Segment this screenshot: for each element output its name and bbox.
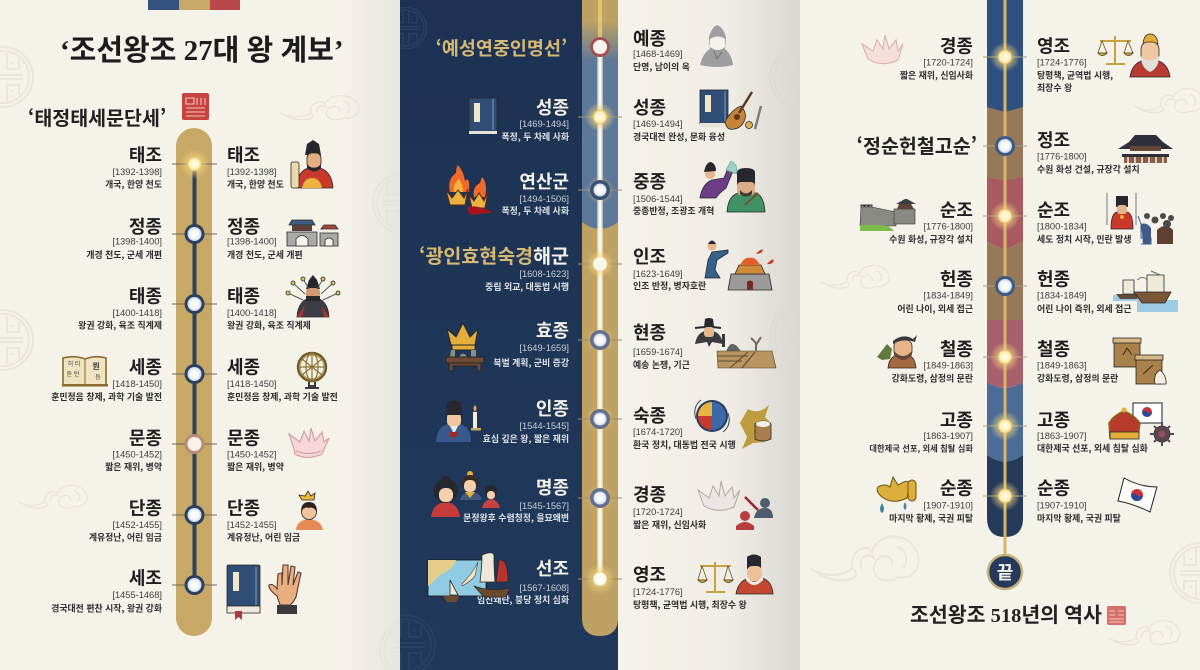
icon: 순종 Korean flag [1118, 478, 1157, 512]
entry: 광해군 [419, 240, 569, 293]
entry: 철종 right: 철종 [1037, 336, 1070, 362]
entry: 세종 left: [1418-1450] [112, 379, 162, 389]
entry: 연산군: 폭정, 두 차례 사화 [501, 204, 569, 217]
entry: 정조 [1037, 126, 1140, 176]
entry: 예종 [633, 25, 690, 73]
entry: 세종 right: [1418-1450] [227, 379, 277, 389]
entry: 광해군: [1608-1623] [519, 269, 569, 279]
entry: 인종: [1544-1545] [519, 421, 569, 431]
entry: 문종 left [105, 424, 162, 473]
entry: 헌종 left: 어린 나이, 외세 접근 [897, 302, 973, 315]
entry: 효종: 효종 [536, 317, 569, 343]
entry: 영조: 탕평책, 균역법 시행, 최장수 왕 [633, 598, 747, 611]
entry: 성종 right: 성종 [633, 94, 666, 120]
entry: 단종 right [227, 494, 300, 544]
entry: 순조 right: 순조 [1037, 196, 1070, 222]
entry: 문종 right: 문종 [227, 424, 260, 450]
title: ‘조선왕조 27대 왕 계보’ [60, 34, 344, 67]
node: 헌종 [995, 276, 1015, 296]
entry: 세종 left: 훈민정음 창제, 과학 기술 발전 [51, 390, 162, 403]
entry: 고종 right: [1863-1907] [1037, 431, 1087, 441]
entry: 태종 left: 왕권 강화, 육조 직계제 [78, 318, 162, 332]
entry: 효종 [493, 317, 569, 369]
entry: 영조 p3: 최장수 왕 [1037, 81, 1072, 94]
icon: 선조 map and ships [428, 553, 510, 602]
entry: 철종 right: 강화도령, 삼정의 문란 [1037, 372, 1118, 384]
entry: 인종 [483, 395, 569, 445]
timeline: panel 1 [172, 128, 217, 636]
node: 인종 [586, 405, 614, 433]
entry: 고종 right: 대한제국 선포, 외세 침탈 심화 [1037, 442, 1148, 454]
entry: 선조: 선조 [536, 555, 569, 581]
icon: 세종 armillary sphere [298, 353, 326, 388]
node: 세종 [184, 364, 204, 384]
icon: 세종 left open book: 듬 [95, 374, 101, 381]
entry: 고종 right: 고종 [1037, 406, 1070, 432]
panel: centre page paper [618, 0, 800, 670]
node: 세조 [184, 575, 204, 595]
entry: 성종 right: 경국대전 완성, 문화 융성 [633, 130, 725, 143]
entry: 고종 left: 고종 [940, 406, 973, 432]
entry: 명종 [463, 474, 569, 524]
entry: 경종 p3: 경종 [940, 32, 973, 58]
icon: 성종 book and guitar [700, 90, 761, 129]
entry: 영조: [1724-1776] [633, 587, 683, 597]
icon: 순조 crowd [1138, 213, 1174, 244]
mnemonic heading: 예성연중인명선: ‘예성연중인명선’ [436, 35, 567, 61]
entry: 순종 right [1037, 474, 1121, 524]
node: 인조 [586, 250, 614, 278]
node: 예종 [590, 37, 610, 57]
entry: 예종: [1468-1469] [633, 49, 683, 59]
entry: 숙종: 숙종 [633, 402, 666, 428]
entry: 태조 right: 태조 [227, 142, 260, 168]
entry: 광해군: 중립 외교, 대동법 시행 [485, 280, 569, 293]
entry: 단종 right: 단종 [227, 494, 260, 520]
entry: 순조 left: [1776-1800] [923, 222, 973, 232]
entry: 순조 right: 세도 정치 시작, 민란 발생 [1037, 232, 1131, 246]
entry: 순종 right: 순종 [1037, 474, 1070, 500]
icon: 정종 gates [287, 220, 338, 246]
entry: 문종 right [227, 424, 284, 473]
mnemonic heading: 정순헌철고순: ‘정순헌철고순’ [857, 130, 977, 159]
entry: 인종: 효심 깊은 왕, 짧은 재위 [483, 432, 569, 445]
entry: 헌종 right: [1834-1849] [1037, 290, 1087, 300]
entry: 문종 left: 짧은 재위, 병약 [105, 460, 162, 473]
entry: 문종 right: [1450-1452] [227, 450, 277, 460]
entry: 순조 left: 수원 화성, 규장각 설치 [889, 232, 973, 246]
entry: 순조 left: 순조 [940, 196, 973, 222]
entry: 효종: [1649-1659] [519, 343, 569, 353]
icon: footer seal [1107, 606, 1126, 625]
entry: 경종 p3: 짧은 재위, 신임사화 [900, 68, 973, 82]
node: 성종 [585, 102, 615, 132]
entry: 철종 left: [1849-1863] [923, 360, 973, 370]
entry: 철종 right: [1849-1863] [1037, 360, 1087, 370]
entry: 경종: [1720-1724] [633, 507, 683, 517]
entry: 순종 left: 마지막 황제, 국권 피탈 [889, 512, 973, 524]
node: 고종 [990, 411, 1020, 441]
entry: 태종 right: [1400-1418] [227, 308, 277, 318]
entry: 세조 left: 경국대전 편찬 시작, 왕권 강화 [51, 602, 162, 614]
node: 효종 [586, 326, 614, 354]
node: 선조 [585, 564, 615, 594]
entry: 영조 p3 [1037, 32, 1113, 94]
entry: 예종: 단명, 남이의 옥 [633, 60, 690, 73]
entry: 세조 left: 세조 [129, 564, 162, 590]
entry: 단종 left: 단종 [129, 494, 162, 520]
entry: 정종 left: 개경 천도, 군세 개편 [86, 248, 162, 261]
entry: 태조 left: 개국, 한양 천도 [105, 178, 162, 190]
entry: 인조: 인조 반정, 병자호란 [633, 279, 706, 292]
entry: 헌종 right: 헌종 [1037, 266, 1070, 292]
icon: 고종 flag, crown, virus [1109, 403, 1174, 446]
entry: 순종 left [889, 474, 973, 524]
entry: 세종 right: 훈민정음 창제, 과학 기술 발전 [227, 390, 338, 403]
entry: 문종 left: [1450-1452] [112, 450, 162, 460]
icon: 예종 hooded ghost [700, 25, 733, 67]
entry: 태종 left: [1400-1418] [112, 308, 162, 318]
entry: 인종: 인종 [536, 395, 569, 421]
icon: 철종 grain bags [1113, 338, 1166, 384]
icon: 영조 scales [698, 562, 733, 592]
node: 태조 [180, 149, 210, 179]
icon: 정조 palace [1118, 135, 1173, 163]
icon: 중종 reformers [700, 161, 765, 212]
entry: 헌종 right: 어린 나이 즉위, 외세 접근 [1037, 302, 1131, 315]
end badge: 끝 [997, 559, 1013, 585]
entry: 철종 left: 철종 [940, 336, 973, 362]
entry: 정종 left: 정종 [129, 213, 162, 239]
entry: 고종 left [869, 406, 973, 454]
entry: 순조 right [1037, 196, 1131, 246]
entry: 정종 right: [1398-1400] [227, 236, 277, 246]
node: 정종 [184, 224, 204, 244]
entry: 정조: 정조 [1037, 126, 1070, 152]
entry: 태조 left: [1392-1398] [112, 167, 162, 177]
entry: 명종: 명종 [536, 474, 569, 500]
entry: 고종 left: [1863-1907] [923, 431, 973, 441]
icon: 연산군 burning crowns [446, 165, 491, 215]
entry: 정조: 수원 화성 건설, 규장각 설치 [1037, 162, 1140, 176]
entry: 선조: 임진왜란, 붕당 정치 심화 [477, 593, 569, 606]
icon: 경종 crown and people [698, 481, 773, 530]
entry: 정조: [1776-1800] [1037, 152, 1087, 162]
entry: 세종 right [227, 354, 338, 403]
entry: 경종 p3 [900, 32, 973, 82]
icon: 세종 left open book [62, 357, 108, 386]
node: 경종/영조 [990, 42, 1020, 72]
entry: 헌종 left: 헌종 [940, 266, 973, 292]
entry: 태조 left: 태조 [129, 142, 162, 168]
entry: 문종 right: 짧은 재위, 병약 [227, 460, 284, 473]
entry: 헌종 right [1037, 266, 1131, 315]
entry: 중종: [1506-1544] [633, 194, 683, 204]
entry: 세조 left [51, 564, 162, 614]
entry: 현종: 예송 논쟁, 기근 [633, 358, 690, 371]
entry: 성종 navy [501, 94, 569, 143]
entry: 경종: 짧은 재위, 신임사화 [633, 518, 706, 531]
icon: 성종 left book [469, 98, 497, 134]
entry: 연산군: 연산군 [519, 168, 569, 194]
entry: 명종: [1545-1567] [519, 501, 569, 511]
entry: 태조 right: [1392-1398] [227, 167, 277, 177]
entry: 경종 [633, 481, 706, 531]
entry: 단종 left [89, 494, 162, 544]
icon: 영조 old king [736, 554, 773, 594]
icon: 세조 raised hand [269, 565, 301, 614]
entry: 단종 left: 계유정난, 어린 임금 [89, 530, 162, 544]
entry: 태조 right: 개국, 한양 천도 [227, 178, 284, 190]
entry: 철종 left [892, 336, 973, 384]
icon: 인조 pointing man and burning fortress [705, 240, 774, 290]
entry: 숙종 [633, 402, 736, 451]
entry: 중종: 중종반정, 조광조 개혁 [633, 204, 714, 217]
icon: 세종 left open book: 뭔 [92, 361, 100, 371]
icon: 순조 wall [860, 199, 916, 231]
entry: 중종: 중종 [633, 168, 666, 194]
entry: 현종: 현종 [633, 319, 666, 345]
entry: 철종 right [1037, 336, 1118, 384]
icon: 문종 pink crown [289, 428, 329, 458]
entry: 세종 right: 세종 [227, 354, 260, 380]
footer: 518 year caption: 조선왕조 518년의 역사 [910, 604, 1102, 627]
entry: 태조 left [105, 142, 162, 190]
timeline: panel 2 [578, 0, 622, 636]
entry: 정종 right [227, 213, 303, 261]
entry: 영조 p3: 탕평책, 균역법 시행, [1037, 68, 1113, 82]
icon: 숙종 wheel and map with rice [695, 400, 771, 449]
icon: 세조 navy book [227, 565, 260, 620]
node: 순조 [990, 201, 1020, 231]
icon: 영조 scales p3 [1098, 36, 1133, 64]
icon: 철종 farmer [877, 335, 917, 368]
icon: 세종 left open book: 듣 턴 [67, 370, 79, 378]
entry: 헌종 left: [1834-1849] [923, 290, 973, 300]
icon: 순조 king with bars [1107, 193, 1136, 229]
entry: 태종 left: 태종 [129, 282, 162, 308]
icon: 명종 queen and family [431, 471, 500, 517]
entry: 태종 right [227, 282, 311, 332]
icon: 헌종 ships [1113, 271, 1178, 312]
entry: 정종 left: [1398-1400] [112, 236, 162, 246]
top colour band [148, 0, 240, 10]
node: 명종 [586, 484, 614, 512]
entry: 순조 left [889, 196, 973, 246]
entry: 경종 p3: [1720-1724] [923, 58, 973, 68]
entry: 선조: [1567-1608] [519, 583, 569, 593]
entry: 경종: 경종 [633, 481, 666, 507]
entry: 인조: 인조 [633, 243, 666, 269]
entry: 헌종 left [897, 266, 973, 315]
entry: 세종 left: 세종 [129, 354, 162, 380]
entry: 광해군: ‘광인효현숙경해군 [419, 240, 569, 269]
entry: 연산군 [501, 168, 569, 217]
node: 중종 [586, 176, 614, 204]
entry: 태조 right [227, 142, 284, 190]
entry: 고종 right [1037, 406, 1148, 454]
entry: 정종 right: 개경 천도, 군세 개편 [227, 248, 303, 261]
entry: 성종 navy: 성종 [536, 94, 569, 120]
icon: 태조 king with scroll [291, 140, 333, 188]
entry: 영조 p3: [1724-1776] [1037, 58, 1087, 68]
icon: 단종 boy with crown [296, 491, 323, 530]
icon: 순종 sorrowful crown [877, 477, 916, 513]
entry: 영조: 영조 [633, 561, 666, 587]
icon: 세종 left open book: 허 티 [68, 360, 80, 368]
entry: 단종 left: [1452-1455] [112, 520, 162, 530]
entry: 영조 p3: 영조 [1037, 32, 1070, 58]
entry: 단종 right: [1452-1455] [227, 520, 277, 530]
entry: 명종: 문정왕후 수렴청정, 을묘왜변 [463, 511, 569, 524]
icon: 경종 pale crown [862, 35, 903, 64]
icon: 인종 man with candle [436, 400, 481, 442]
entry: 현종 [633, 319, 690, 371]
entry: 태종 right: 태종 [227, 282, 260, 308]
entry: 인조: [1623-1649] [633, 269, 683, 279]
node: 순종 [990, 481, 1020, 511]
icon: 현종 scholars and field [695, 318, 776, 368]
entry: 성종 navy: 폭정, 두 차례 사화 [501, 130, 569, 143]
entry: 숙종: [1674-1720] [633, 427, 683, 437]
icon: red seal [182, 93, 209, 120]
entry: 세종 left [51, 354, 162, 403]
entry: 세조 left: [1455-1468] [112, 590, 162, 600]
entry: 순조 right: [1800-1834] [1037, 222, 1087, 232]
entry: 중종 [633, 168, 714, 217]
entry: 성종 navy: [1469-1494] [519, 119, 569, 129]
entry: 숙종: 환국 정치, 대동법 전국 시행 [633, 438, 736, 451]
icon: 영조 old king p3 [1130, 34, 1170, 77]
entry: 태종 right: 왕권 강화, 육조 직계제 [227, 318, 311, 332]
entry: 선조 [477, 555, 569, 606]
entry: 순종 left: 순종 [940, 474, 973, 500]
node: 태종 [184, 294, 204, 314]
mnemonic heading: 태정태세문단세: ‘태정태세문단세’ [28, 102, 166, 131]
entry: 정종 left [86, 213, 162, 261]
entry: 인조 [633, 243, 706, 292]
entry: 현종: [1659-1674] [633, 347, 683, 357]
entry: 예종: 예종 [633, 25, 666, 51]
panel: centre navy column [400, 0, 618, 670]
entry: 순종 left: [1907-1910] [923, 500, 973, 510]
entry: 순종 right: 마지막 황제, 국권 피탈 [1037, 512, 1121, 524]
entry: 성종 right [633, 94, 725, 143]
entry: 연산군: [1494-1506] [519, 194, 569, 204]
end badge [988, 555, 1022, 589]
entry: 단종 right: 계유정난, 어린 임금 [227, 530, 300, 544]
entry: 철종 left: 강화도령, 삼정의 문란 [892, 372, 973, 384]
panel: left page fold [340, 0, 400, 670]
timeline: panel 3 [983, 0, 1027, 555]
icon: 효종 crown on table [446, 323, 484, 371]
node: 단종 [184, 505, 204, 525]
entry: 효종: 북벌 계획, 군비 증강 [493, 356, 569, 369]
node: 철종 [990, 342, 1020, 372]
node: 문종 [184, 434, 204, 454]
entry: 순종 right: [1907-1910] [1037, 500, 1087, 510]
entry: 고종 left: 대한제국 선포, 외세 침탈 심화 [869, 442, 973, 454]
entry: 영조 [633, 561, 747, 611]
entry: 성종 right: [1469-1494] [633, 119, 683, 129]
entry: 태종 left [78, 282, 162, 332]
entry: 정종 right: 정종 [227, 213, 260, 239]
icon: 태종 armored king [286, 275, 340, 317]
node: 정조 [995, 136, 1015, 156]
entry: 문종 left: 문종 [129, 424, 162, 450]
